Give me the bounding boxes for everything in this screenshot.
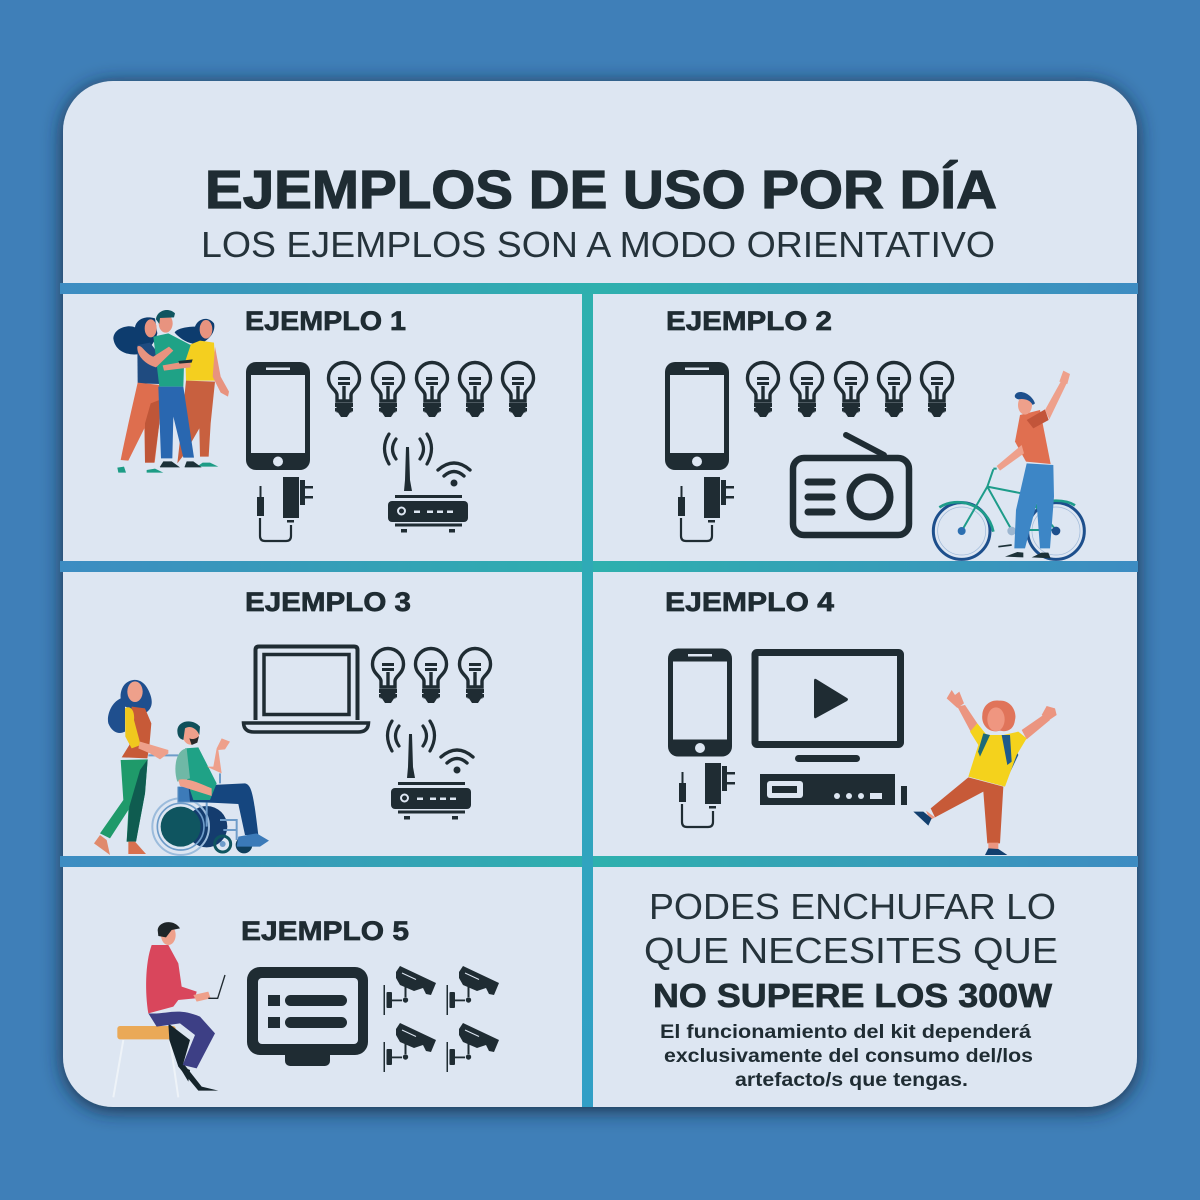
illustration: man with laptop on stool xyxy=(113,922,225,1097)
icon: television with play symbol xyxy=(755,652,900,762)
icon: phone xyxy=(246,362,310,470)
text: disclaimer xyxy=(660,1022,1033,1091)
text: disclaimer: artefacto/s que tengas. xyxy=(735,1070,968,1091)
icon: charger xyxy=(678,477,734,541)
illustration: woman pushing man in wheelchair xyxy=(94,680,269,855)
icon: charger xyxy=(679,763,735,827)
panel: main card xyxy=(63,81,1137,1107)
icon: five light bulbs xyxy=(748,362,952,417)
panel: ejemplo 4 xyxy=(665,587,1057,855)
icon: five light bulbs xyxy=(328,362,534,417)
illustration: jumping child xyxy=(913,690,1057,855)
icon: three light bulbs xyxy=(372,648,490,703)
heading: ejemplo 4: EJEMPLO 4 xyxy=(665,587,834,617)
heading: ejemplo 2: EJEMPLO 2 xyxy=(666,306,832,336)
panel: ejemplo 5 xyxy=(113,916,499,1097)
icon: monitoring screen xyxy=(247,967,368,1066)
icon: wifi router xyxy=(388,721,473,820)
heading: ejemplo 5: EJEMPLO 5 xyxy=(241,916,409,946)
icon: charger xyxy=(257,477,313,541)
icon: radio xyxy=(793,435,909,535)
illustration: person with bicycle xyxy=(933,371,1084,559)
panel: ejemplo 1 xyxy=(113,306,534,541)
text: disclaimer: exclusivamente del consumo del/los xyxy=(664,1046,1033,1067)
title: EJEMPLOS DE USO POR DÍA xyxy=(205,160,997,220)
panel: note on 300W limit xyxy=(644,886,1058,1091)
text: que necesites: QUE NECESITES QUE xyxy=(644,930,1058,971)
icon: security cameras xyxy=(384,966,499,1072)
icon: laptop xyxy=(244,646,368,732)
icon: wifi router xyxy=(384,434,470,532)
panel: ejemplo 2 xyxy=(665,306,1084,559)
text: disclaimer: El funcionamiento del kit dependerá xyxy=(660,1022,1031,1043)
text: podes enchufar: PODES ENCHUFAR LO xyxy=(649,886,1056,927)
text: no supere los 300W: NO SUPERE LOS 300W xyxy=(653,977,1053,1014)
icon: phone xyxy=(665,362,729,470)
heading: ejemplo 1: EJEMPLO 1 xyxy=(245,306,406,336)
subtitle: LOS EJEMPLOS SON A MODO ORIENTATIVO xyxy=(201,224,995,265)
icon: set-top box xyxy=(760,774,907,805)
icon: phone xyxy=(668,648,732,756)
heading: ejemplo 3: EJEMPLO 3 xyxy=(245,587,411,617)
panel: ejemplo 3 xyxy=(94,587,490,855)
illustration: group of friends xyxy=(113,310,229,473)
